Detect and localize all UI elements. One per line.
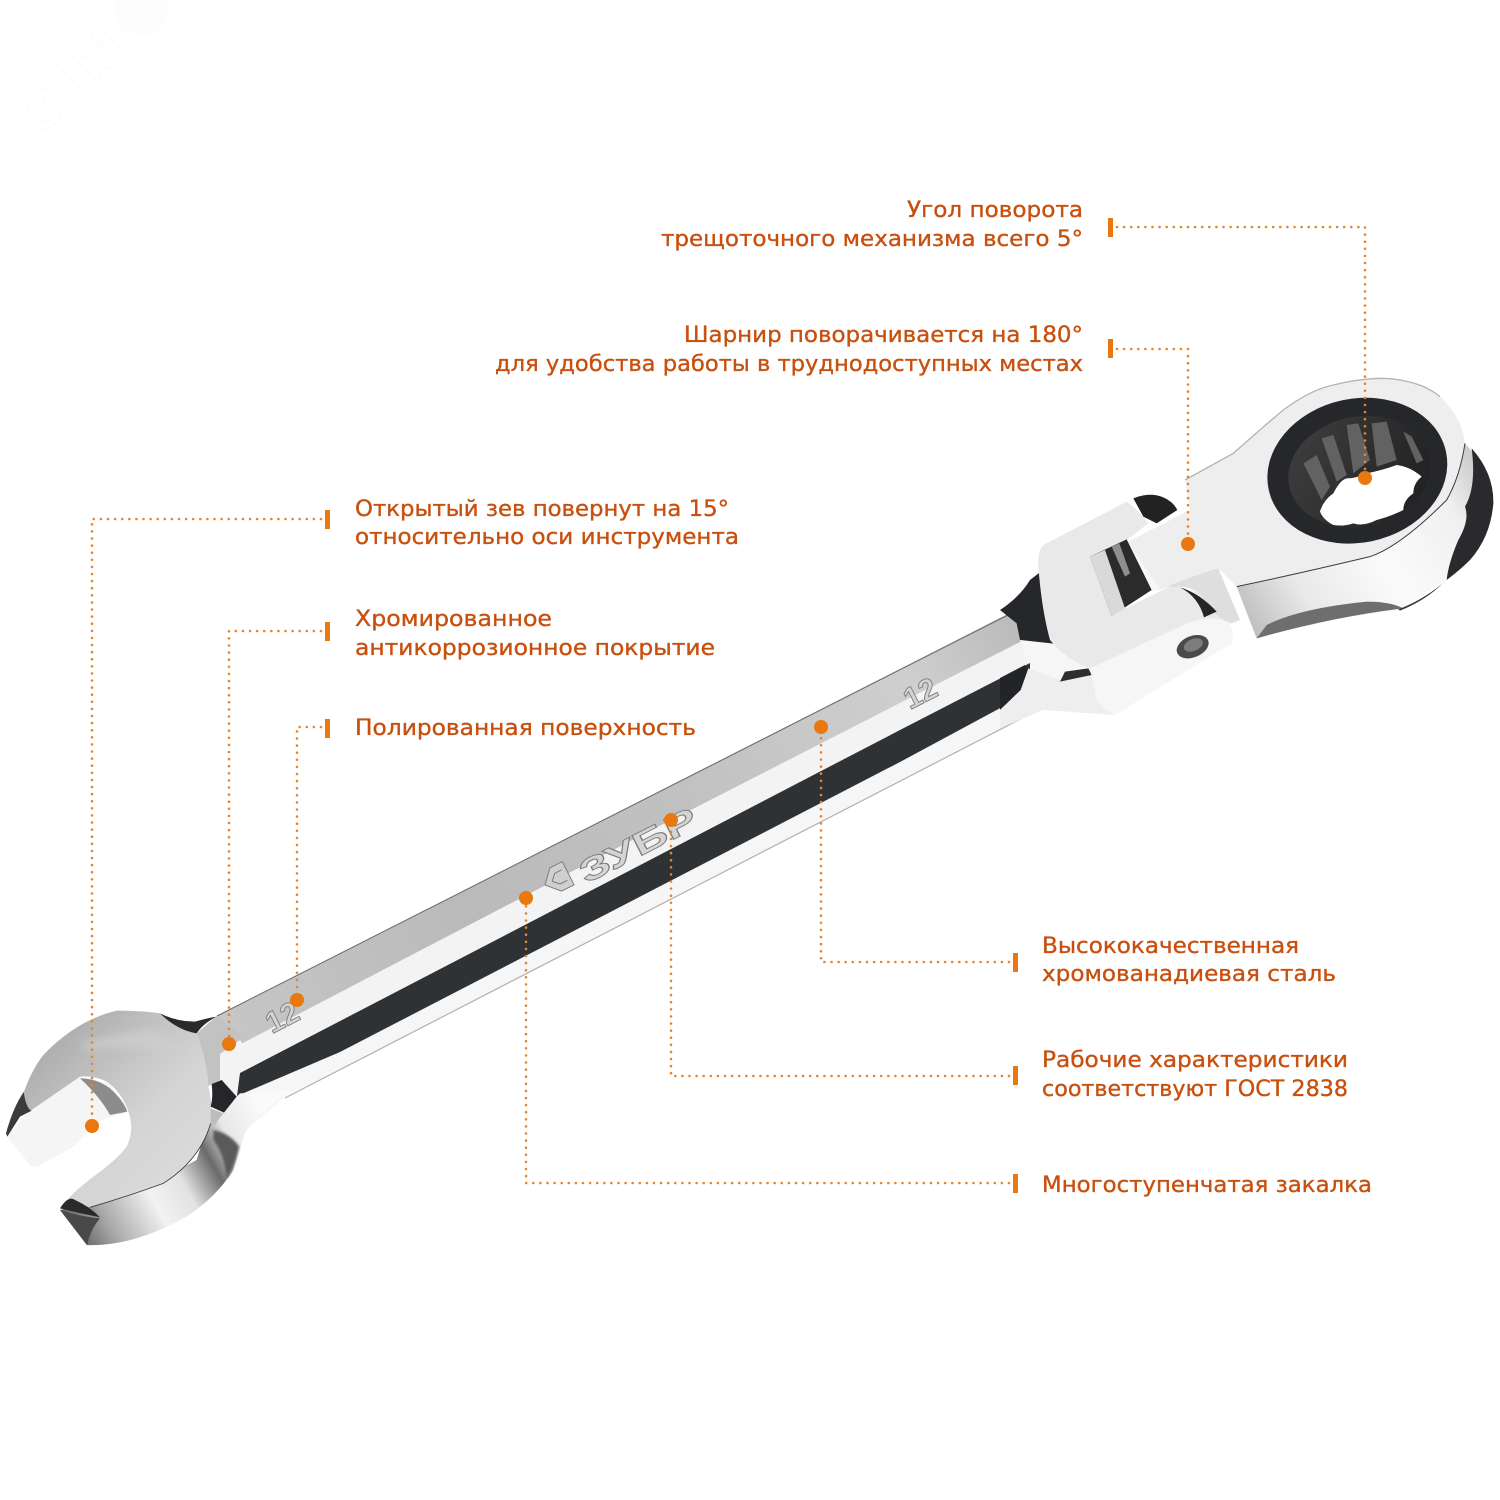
tongue edge xyxy=(1128,537,1160,592)
callout: GOST: Рабочие характеристики xyxy=(1042,1048,1348,1073)
callout: chrome coating xyxy=(222,607,715,1051)
callout: open jaw xyxy=(85,497,739,1133)
ratchet top face xyxy=(1128,378,1465,590)
callout: steel: Высококачественная xyxy=(1042,934,1299,959)
head top face xyxy=(24,1011,212,1207)
engraving: brand: ЗУБР xyxy=(573,800,703,890)
hinge and ratchet head xyxy=(1000,378,1493,728)
open-end head xyxy=(6,1011,300,1245)
ratchet opening xyxy=(1320,465,1422,526)
callout: ratchet angle: трещоточного механизма всего 5° xyxy=(661,227,1083,252)
callout: ratchet angle: Угол поворота xyxy=(907,198,1083,223)
opening xyxy=(67,1112,131,1177)
neck light facet xyxy=(220,1040,253,1097)
ratchet teeth xyxy=(1303,422,1423,500)
callout: chrome coating: антикоррозионное покрытие xyxy=(355,636,715,661)
neck dark wedge xyxy=(160,1013,217,1033)
callout: steel xyxy=(814,720,1336,987)
hinge lug xyxy=(1090,618,1233,715)
callout: steel: хромованадиевая сталь xyxy=(1042,962,1336,987)
shaft junction xyxy=(1000,568,1115,728)
watermark: ЭТМ xyxy=(6,15,136,144)
engraving: 12 near hinge: 12 xyxy=(898,672,943,716)
callout: GOST: соответствуют ГОСТ 2838 xyxy=(1042,1077,1348,1102)
callout: hinge xyxy=(495,323,1195,551)
callout: chrome coating: Хромированное xyxy=(355,607,552,632)
jaw inner face xyxy=(7,1077,132,1167)
callout: hardening: Многоступенчатая закалка xyxy=(1042,1173,1372,1198)
brand mark xyxy=(539,862,574,897)
rivet xyxy=(1173,631,1212,663)
callout: polished surface: Полированная поверхность xyxy=(355,716,696,741)
wrench illustration xyxy=(6,378,1493,1245)
shaft xyxy=(214,600,1095,1135)
jaw tip xyxy=(6,1092,32,1137)
callout: hardening xyxy=(519,891,1372,1198)
ratchet side band xyxy=(1237,443,1493,638)
callout: GOST xyxy=(664,813,1348,1102)
engraving: 12 near open end: 12 xyxy=(260,996,305,1040)
neck face xyxy=(197,1016,243,1086)
callout: open jaw: Открытый зев повернут на 15° xyxy=(355,497,729,522)
jaw side xyxy=(60,1090,300,1245)
callout: polished surface xyxy=(290,716,696,1007)
callout: hinge: Шарнир поворачивается на 180° xyxy=(684,323,1083,348)
callout: open jaw: относительно оси инструмента xyxy=(355,525,739,550)
callout: hinge: для удобства работы в труднодоступных местах xyxy=(495,352,1083,377)
hinge shoulder xyxy=(1167,568,1240,623)
hinge fork xyxy=(1038,495,1240,715)
neck dark patch xyxy=(211,1080,237,1113)
callout: ratchet angle xyxy=(661,198,1372,485)
slot xyxy=(1090,539,1152,616)
watermark xyxy=(6,0,183,144)
ring xyxy=(1254,381,1461,560)
